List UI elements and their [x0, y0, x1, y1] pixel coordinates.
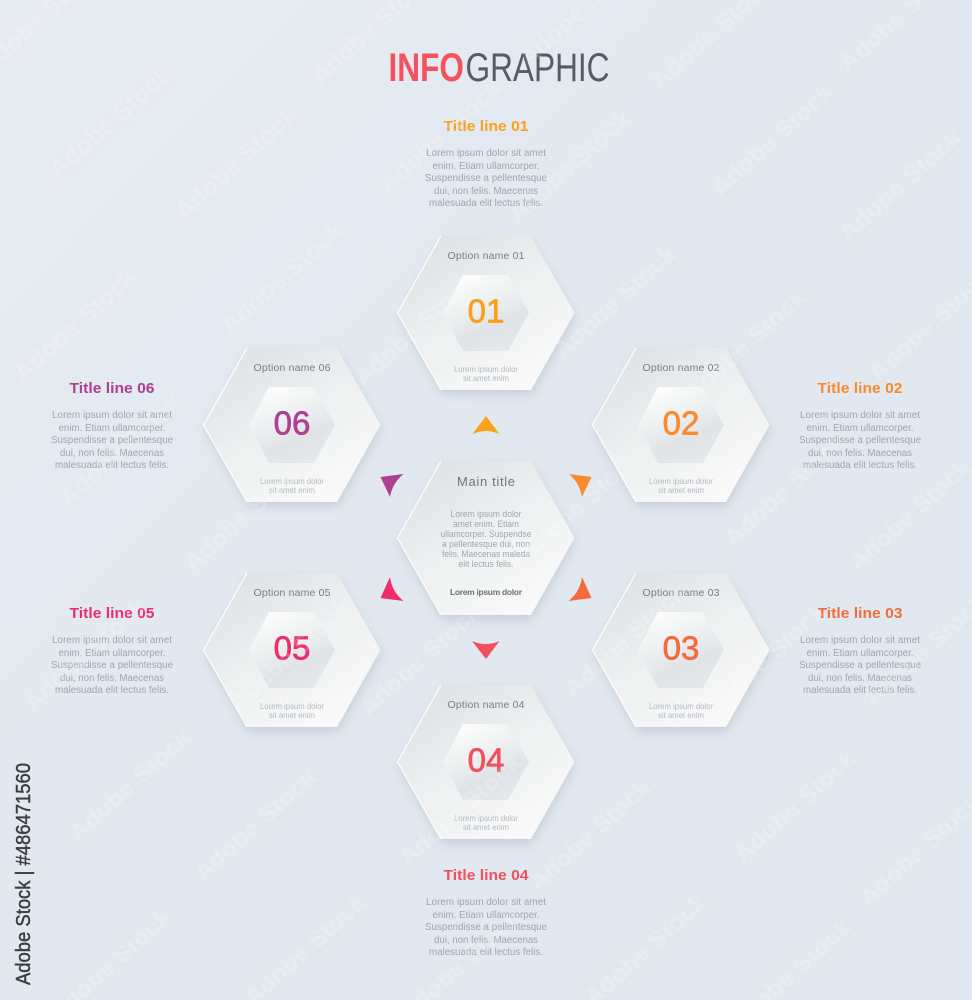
panel: hexagon 06 — [204, 348, 380, 502]
text block: title line 03: malesuada elit lectus felis. — [803, 685, 917, 696]
text block: title line 01: malesuada elit lectus felis. — [429, 198, 543, 209]
panel: main hexagon: Lorem ipsum dolor — [450, 587, 523, 597]
watermark pattern: Adobe Stock — [224, 593, 357, 717]
text block: title line 06 — [51, 380, 173, 471]
text block: title line 02: malesuada elit lectus felis. — [803, 460, 917, 471]
text block: title line 05: Suspendisse a pellentesque — [51, 660, 173, 671]
arrow: to option 04 — [472, 641, 500, 659]
panel: hexagon 01: Option name 01 — [448, 250, 525, 262]
panel: main hexagon: ullamcorper. Suspendse — [440, 529, 532, 539]
text block: title line 04: Lorem ipsum dolor sit amet — [426, 897, 546, 908]
arrow: to option 01 — [472, 416, 500, 434]
watermark pattern: Adobe Stock — [189, 763, 322, 887]
panel: hexagon 06: sit amet enim — [269, 486, 315, 495]
text block: title line 03: Lorem ipsum dolor sit amet — [800, 635, 920, 646]
panel: hexagon 04: sit amet enim — [463, 823, 509, 832]
panel: hexagon 02: 02 — [663, 404, 699, 442]
panel: hexagon 03: sit amet enim — [658, 711, 704, 720]
text block: title line 05: enim. Etiam ullamcorper. — [58, 648, 166, 659]
text block: title line 04: Title line 04 — [444, 867, 529, 884]
watermark pattern: Adobe Stock — [374, 74, 507, 198]
watermark pattern: Adobe Stock — [504, 104, 637, 228]
panel: hexagon 04: 04 — [468, 742, 504, 778]
text block: title line 02: dui, non felis. Maecenas — [808, 448, 912, 459]
text block: title line 02: Title line 02 — [818, 380, 902, 397]
text block: title line 03: dui, non felis. Maecenas — [808, 673, 912, 684]
text block: title line 05: Lorem ipsum dolor sit amet — [52, 635, 172, 646]
watermark pattern: Adobe Stock — [179, 453, 312, 577]
panel: main hexagon: amet enim. Etiam — [453, 519, 519, 529]
text block: title line 01: dui, non felis. Maecenas — [434, 186, 538, 197]
text block: title line 01: enim. Etiam ullamcorper. — [432, 161, 540, 172]
text block: title line 02: Lorem ipsum dolor sit amet — [800, 410, 920, 421]
panel: main hexagon: a pellentesque dui, non — [442, 539, 530, 549]
watermark pattern: Adobe Stock — [216, 216, 349, 340]
watermark pattern: Adobe Stock — [679, 283, 812, 407]
text block: title line 01 — [425, 118, 547, 209]
arrow: to option 03 — [568, 577, 592, 601]
text block: title line 05: Title line 05 — [70, 605, 154, 622]
text block: title line 05: dui, non felis. Maecenas — [60, 673, 164, 684]
arrow: to option 06 — [380, 474, 404, 497]
panel: main hexagon: felis. Maecenas maleda — [442, 549, 531, 559]
text block: title line 06: Title line 06 — [70, 380, 154, 397]
watermark pattern: Adobe Stock — [19, 593, 152, 717]
text block: title line 04: enim. Etiam ullamcorper. — [432, 910, 540, 921]
text block: title line 04: Suspendisse a pellentesque — [425, 922, 547, 933]
panel: hexagon 04 — [398, 685, 574, 839]
text block: title line 02: enim. Etiam ullamcorper. — [806, 423, 914, 434]
text block: title line 04: dui, non felis. Maecenas — [434, 935, 538, 946]
title: GRAPHIC — [466, 46, 610, 90]
panel: hexagon 05: Option name 05 — [254, 587, 331, 599]
panel: hexagon 03 — [592, 573, 770, 727]
arrow: to option 05 — [380, 577, 404, 601]
watermark pattern: Adobe Stock — [719, 428, 852, 552]
text block: title line 02 — [799, 380, 921, 471]
text block: title line 06: Suspendisse a pellentesque — [51, 435, 173, 446]
panel: main hexagon: Lorem ipsum dolor — [450, 509, 522, 519]
text block: title line 06: Lorem ipsum dolor sit amet — [52, 410, 172, 421]
text block: title line 04 — [425, 867, 547, 958]
watermark pattern: Adobe Stock — [699, 598, 832, 722]
panel: main hexagon — [398, 461, 574, 615]
panel: hexagon 01: Lorem ipsum dolor — [454, 365, 518, 374]
panel: hexagon 06: 06 — [274, 404, 310, 442]
panel: hexagon 05: sit amet enim — [269, 711, 315, 720]
watermark pattern: Adobe Stock — [729, 744, 862, 868]
watermark pattern: Adobe Stock — [834, 123, 967, 247]
text block: title line 06: dui, non felis. Maecenas — [60, 448, 164, 459]
panel: hexagon 02: Option name 02 — [642, 362, 720, 374]
title: INFO — [388, 46, 464, 90]
text block: title line 03: enim. Etiam ullamcorper. — [806, 648, 914, 659]
text block: title line 03: Suspendisse a pellentesque — [799, 660, 921, 671]
watermark pattern: Adobe Stock — [844, 453, 972, 577]
panel: hexagon 05 — [204, 573, 380, 727]
panel: hexagon 01: 01 — [468, 292, 504, 330]
watermark pattern: Adobe Stock — [706, 78, 839, 202]
text block: title line 03 — [799, 605, 921, 696]
title — [388, 46, 610, 90]
text block: title line 02: Suspendisse a pellentesque — [799, 435, 921, 446]
panel: hexagon 02 — [592, 348, 770, 502]
text block: title line 06: malesuada elit lectus felis. — [55, 460, 169, 471]
panel: hexagon 01: sit amet enim — [463, 374, 509, 383]
arrow: to option 02 — [569, 474, 592, 497]
panel: hexagon 05: 05 — [274, 630, 310, 666]
watermark pattern: Adobe Stock — [514, 443, 647, 567]
text block: title line 03: Title line 03 — [818, 605, 902, 622]
panel: hexagon 01 — [398, 236, 574, 390]
panel: hexagon 02: sit amet enim — [658, 486, 704, 495]
panel: main hexagon: elit lectus felis. — [458, 559, 514, 569]
panel: hexagon 06: Lorem ipsum dolor — [260, 477, 324, 486]
watermark pattern: Adobe Stock — [354, 598, 487, 722]
panel: hexagon 04: Option name 04 — [448, 699, 525, 711]
panel: hexagon 02: Lorem ipsum dolor — [649, 477, 713, 486]
text block: title line 05: malesuada elit lectus felis. — [55, 685, 169, 696]
stock id label: Adobe Stock | #486471560 — [13, 763, 35, 985]
text block: title line 04: malesuada elit lectus felis. — [429, 947, 543, 958]
watermark pattern: Adobe Stock — [394, 748, 527, 872]
watermark pattern: Adobe Stock — [549, 240, 682, 364]
panel: hexagon 03: Lorem ipsum dolor — [649, 702, 713, 711]
watermark pattern: Adobe Stock — [170, 101, 303, 225]
text block: title line 01: Suspendisse a pellentesque — [425, 173, 547, 184]
text block: title line 01: Lorem ipsum dolor sit amet — [426, 148, 546, 159]
panel: hexagon 06: Option name 06 — [254, 362, 331, 374]
watermark pattern: Adobe Stock — [9, 263, 142, 387]
text block: title line 05 — [51, 605, 173, 696]
panel: main hexagon: Main title — [457, 474, 515, 489]
watermark pattern: Adobe Stock — [44, 60, 177, 184]
text block: title line 06: enim. Etiam ullamcorper. — [58, 423, 166, 434]
panel: hexagon 03: 03 — [663, 630, 699, 666]
panel: hexagon 05: Lorem ipsum dolor — [260, 702, 324, 711]
watermark pattern: Adobe Stock — [524, 773, 657, 897]
panel: hexagon 03: Option name 03 — [642, 587, 720, 599]
watermark pattern: Adobe Stock — [349, 268, 482, 392]
watermark pattern: Adobe Stock — [559, 578, 692, 702]
watermark pattern: Adobe Stock — [54, 388, 187, 512]
panel: hexagon 04: Lorem ipsum dolor — [454, 814, 518, 823]
text block: title line 01: Title line 01 — [444, 118, 528, 135]
watermark pattern: Adobe Stock — [64, 723, 197, 847]
